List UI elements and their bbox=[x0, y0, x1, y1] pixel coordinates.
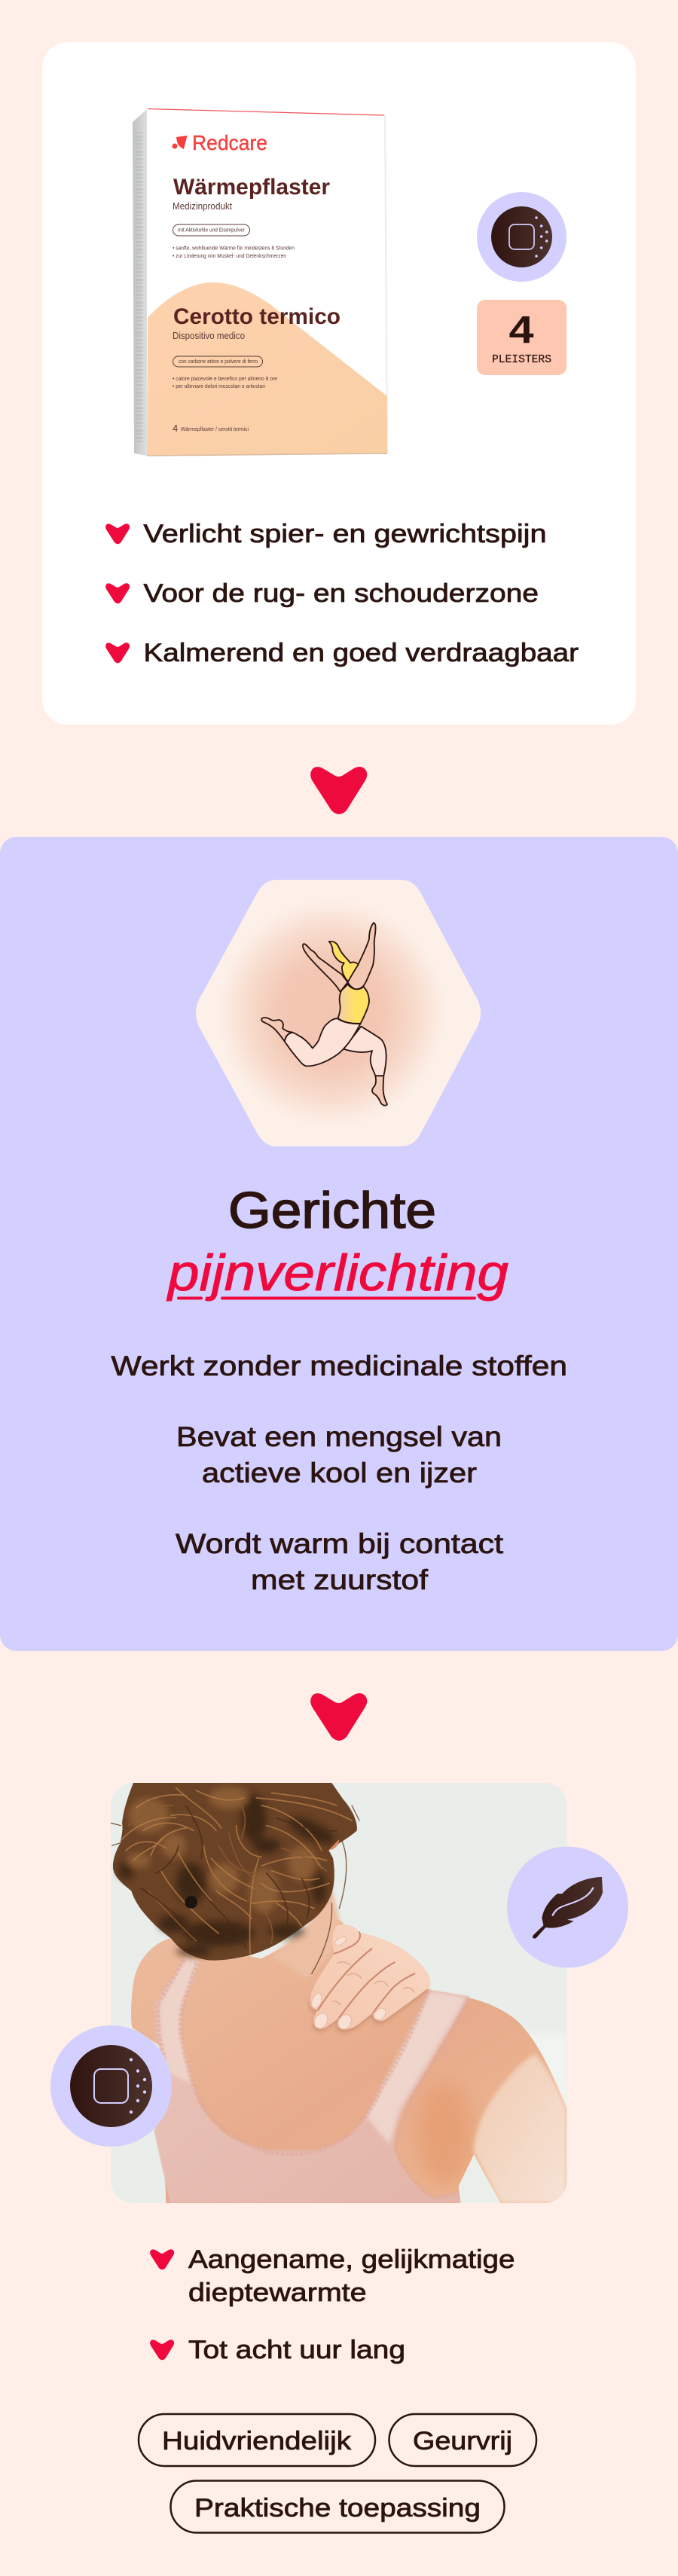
benefit text: Voor de rug- en schouderzone bbox=[143, 579, 539, 608]
hand shadow bbox=[308, 1987, 429, 2034]
badge: 4 plasters: PLEISTERS bbox=[492, 354, 551, 366]
text block 3 bbox=[176, 1528, 504, 1595]
tag: fragrance free bbox=[389, 2414, 536, 2466]
panel: product card bbox=[42, 42, 636, 725]
arrow: heart down 1 bbox=[310, 767, 367, 814]
bullet icon bbox=[105, 523, 130, 544]
box bullets Italian bbox=[173, 377, 277, 389]
benefit text: Kalmerend en goed verdraagbaar bbox=[143, 639, 579, 667]
badge: 4 plasters: 4 bbox=[509, 308, 534, 351]
tag: practical application bbox=[170, 2481, 505, 2532]
photo: woman holding shoulder bbox=[111, 1783, 568, 2205]
icon: heat patch bbox=[477, 192, 567, 282]
arrow: heart down 2 bbox=[310, 1693, 367, 1741]
tag: skin friendly: Huidvriendelijk bbox=[162, 2427, 352, 2455]
box quantity: 4 bbox=[173, 423, 178, 434]
badge: 4 plasters bbox=[477, 300, 567, 375]
benefit list bbox=[105, 520, 579, 667]
feature text: Tot acht uur lang bbox=[188, 2336, 405, 2364]
box pill Italian bbox=[173, 356, 262, 367]
tag: skin friendly bbox=[139, 2414, 375, 2466]
icon: leaping figure bbox=[261, 923, 387, 1106]
box bullets German bbox=[173, 246, 295, 259]
icon: heat patch 2 bbox=[50, 2025, 172, 2147]
heading accent: pijnverlichting bbox=[166, 1244, 508, 1302]
text block 3: Wordt warm bij contact bbox=[176, 1528, 504, 1559]
box pill German bbox=[173, 224, 250, 236]
text block 2 bbox=[176, 1421, 502, 1488]
box bullets Italian: • calore piacevole e benefico per almeno 8 ore bbox=[173, 377, 277, 382]
bullet icon bbox=[105, 642, 130, 663]
text block 2: actieve kool en ijzer bbox=[202, 1457, 477, 1488]
feature list bbox=[150, 2245, 515, 2364]
feature text: Aangename, gelijkmatige bbox=[188, 2245, 515, 2274]
box quantity: Wärmepflaster / cerotti termici bbox=[181, 426, 249, 432]
tag: practical application: Praktische toepassing bbox=[194, 2494, 481, 2523]
box bullets German: • sanfte, wohltuende Wärme für mindestens 8 Stunden bbox=[173, 246, 295, 252]
benefit text: Verlicht spier- en gewrichtspijn bbox=[143, 520, 547, 548]
text block 1: Werkt zonder medicinale stoffen bbox=[111, 1351, 567, 1381]
hair bbox=[113, 1783, 357, 1961]
straps bbox=[367, 1992, 466, 2144]
feature text bbox=[188, 2245, 515, 2307]
icon: feather bbox=[507, 1847, 628, 1967]
hexagon with figure bbox=[196, 880, 481, 1146]
bullet icon bbox=[150, 2249, 174, 2269]
hand bbox=[310, 1924, 430, 2030]
bullet icon bbox=[105, 583, 130, 603]
brand name: Redcare bbox=[192, 131, 267, 154]
tag: fragrance free: Geurvrij bbox=[413, 2427, 512, 2455]
text block 3: met zuurstof bbox=[251, 1564, 429, 1595]
tank top body bbox=[154, 1958, 470, 2203]
box subtitle German: Medizinprodukt bbox=[173, 200, 232, 212]
feature text: dieptewarmte bbox=[188, 2278, 366, 2307]
box bullets Italian: • per alleviare dolori muscolari e articolari bbox=[173, 384, 265, 389]
box subtitle Italian: Dispositivo medico bbox=[173, 330, 245, 341]
box pill German: mit Aktivkohle und Eisenpulver bbox=[178, 226, 245, 233]
heading: Gerichte bbox=[228, 1182, 436, 1239]
logo mark bbox=[172, 136, 187, 149]
bullet icon bbox=[150, 2339, 174, 2360]
product box bbox=[133, 108, 387, 456]
text block 2: Bevat een mengsel van bbox=[176, 1421, 502, 1452]
box pill Italian: con carbone attivo e polvere di ferro bbox=[179, 358, 258, 365]
box title German: Wärmepflaster bbox=[173, 175, 330, 200]
heading bbox=[166, 1182, 508, 1302]
box quantity bbox=[173, 423, 249, 434]
box bullets German: • zur Linderung von Muskel- und Gelenkschmerzen bbox=[173, 254, 286, 259]
panel: targeted pain relief bbox=[0, 837, 678, 1651]
lace bbox=[157, 1960, 468, 2197]
box title Italian: Cerotto termico bbox=[173, 304, 341, 329]
